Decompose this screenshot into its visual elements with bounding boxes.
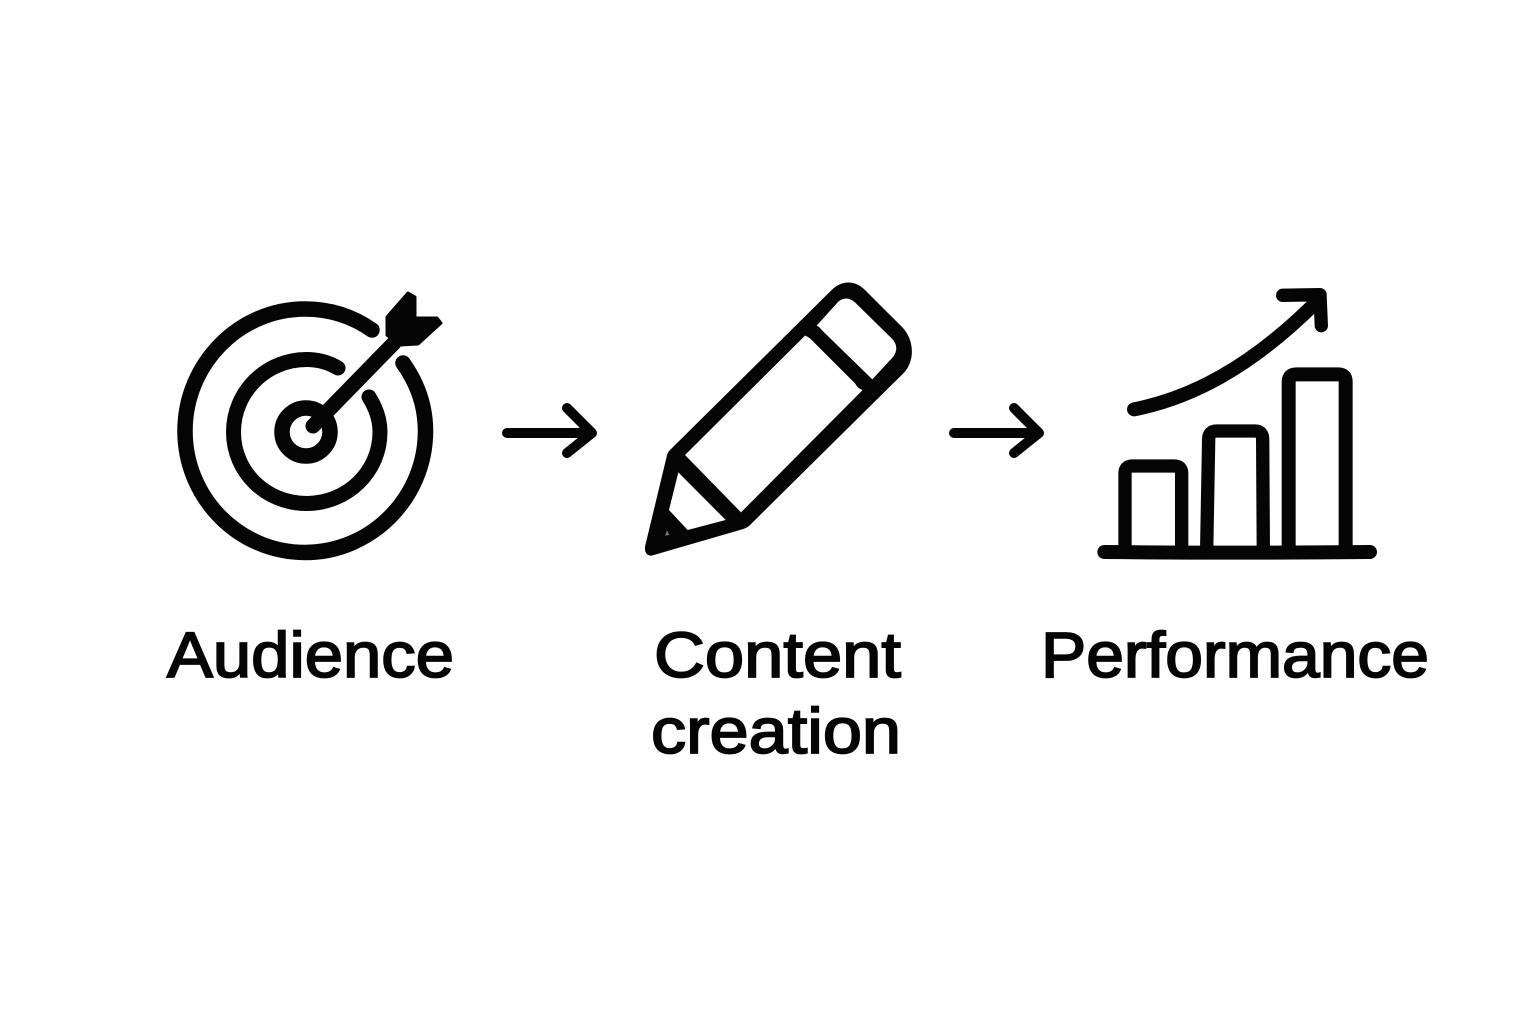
icon: pencil <box>645 282 912 556</box>
label: Audience: Audience <box>167 619 454 691</box>
icon: target with arrow <box>185 293 441 552</box>
icon: bar chart with rising arrow <box>1104 295 1370 553</box>
arrow: audience to content <box>507 408 592 453</box>
label: Content creation: Content <box>654 619 901 691</box>
label: Performance: Performance <box>1041 619 1429 691</box>
label: Content creation: creation <box>651 695 901 767</box>
arrow: content to performance <box>954 408 1039 453</box>
label: Content creation <box>651 619 901 767</box>
